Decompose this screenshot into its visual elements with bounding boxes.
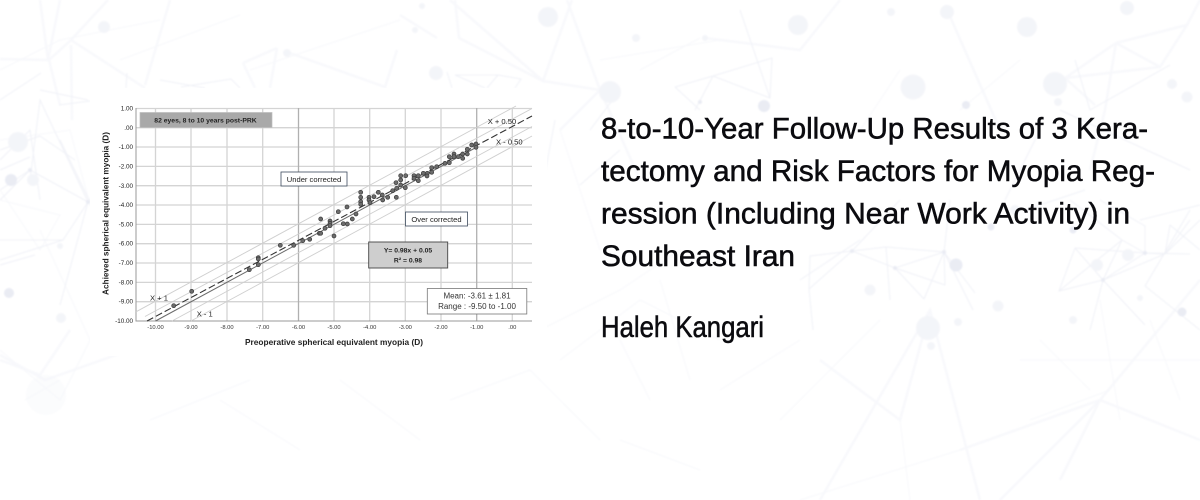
y axis tick labels (115, 106, 133, 325)
line label: X - 1: X - 1 (197, 310, 213, 319)
author: Haleh Kangari (601, 311, 764, 344)
x axis tick labels: -6.00 (292, 325, 305, 331)
y axis tick labels: -2.00 (119, 164, 133, 170)
chart axes (136, 108, 532, 321)
over corrected label: Over corrected (411, 215, 462, 224)
y axis tick labels: 1.00 (121, 106, 133, 112)
scatter points (172, 142, 478, 308)
under corrected label (281, 172, 347, 186)
line label: X - 0.50: X - 0.50 (496, 138, 523, 146)
x axis tick labels: -9.00 (184, 325, 198, 331)
y axis title: Achieved spherical equivalent myopia (D) (100, 132, 110, 295)
chart grid (136, 108, 532, 321)
title: Southeast Iran (601, 240, 795, 273)
x axis title: Preoperative spherical equivalent myopia (D) (245, 337, 423, 347)
y axis tick labels: -6.00 (119, 240, 133, 248)
mean and range box (427, 288, 527, 314)
x axis tick labels: -2.00 (434, 325, 448, 331)
y axis tick labels: -8.00 (119, 280, 133, 286)
reference lines (136, 106, 532, 321)
x axis tick labels (147, 325, 516, 331)
regression equation box: R² = 0.98 (394, 258, 422, 264)
mean and range box: Mean: -3.61 ± 1.81 (443, 292, 511, 300)
x axis tick labels: -7.00 (256, 325, 269, 331)
mean and range box: Range : -9.50 to -1.00 (438, 302, 516, 311)
line label: X + 0.50: X + 0.50 (488, 117, 516, 126)
y axis tick labels: -1.00 (119, 144, 133, 151)
under corrected label: Under corrected (287, 175, 341, 184)
sample size label (140, 112, 272, 128)
y axis tick labels: .00 (124, 125, 133, 132)
regression equation box: Y= 0.98x + 0.05 (384, 248, 432, 254)
x axis tick labels: -3.00 (399, 325, 412, 331)
x axis tick labels: -8.00 (220, 325, 234, 331)
x axis tick labels: -10.00 (147, 325, 164, 331)
y axis tick labels: -5.00 (119, 222, 133, 228)
x axis tick labels: -1.00 (470, 325, 483, 331)
x axis tick labels: .00 (508, 325, 516, 331)
x axis tick labels: -4.00 (363, 325, 376, 331)
y axis tick labels: -4.00 (119, 202, 133, 209)
title: 8-to-10-Year Follow-Up Results of 3 Kera- (601, 112, 1148, 146)
title (601, 112, 1155, 273)
title: tectomy and Risk Factors for Myopia Reg- (601, 155, 1155, 188)
regression equation box (369, 242, 448, 268)
y axis tick labels: -3.00 (119, 183, 133, 190)
x axis tick labels: -5.00 (327, 325, 341, 331)
sample size label: 82 eyes, 8 to 10 years post-PRK (154, 118, 257, 124)
line label: X + 1: X + 1 (150, 294, 168, 303)
y axis tick labels: -7.00 (119, 260, 133, 267)
y axis tick labels: -9.00 (119, 298, 133, 306)
over corrected label (406, 212, 468, 226)
chart panel (90, 88, 547, 356)
y axis tick labels: -10.00 (115, 318, 133, 325)
title: ression (Including Near Work Activity) in (601, 198, 1130, 230)
